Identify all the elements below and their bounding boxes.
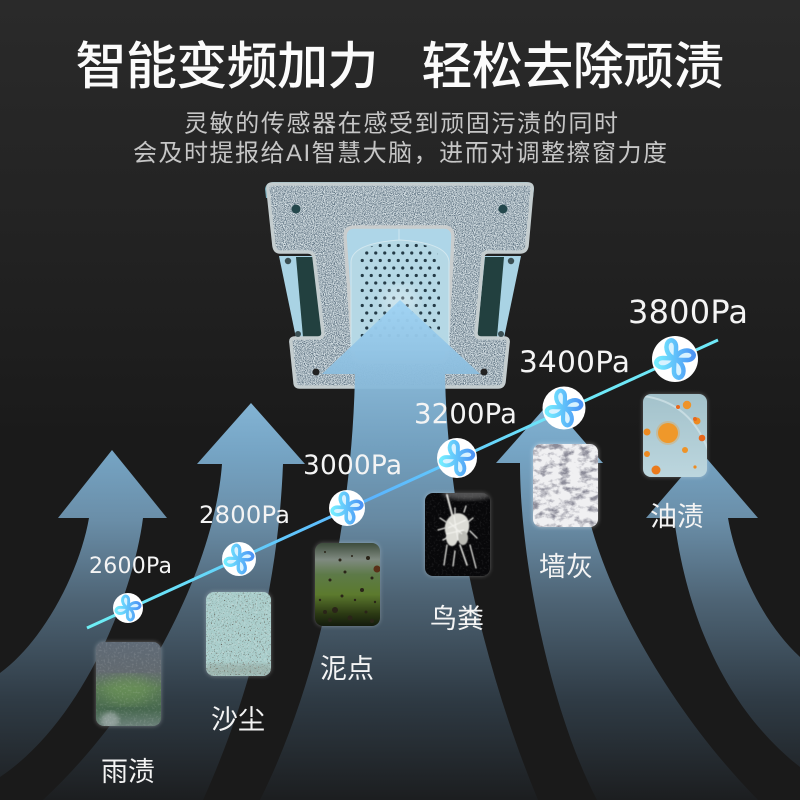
stain labels: 沙尘	[211, 705, 265, 735]
pressure labels: 3800Pa	[628, 293, 748, 331]
pressure labels	[89, 293, 748, 579]
subtitle text	[133, 110, 667, 167]
title: 智能变频加力	[76, 38, 378, 95]
photo: oil stains	[643, 394, 708, 477]
window robot device	[262, 180, 538, 392]
photo: rain stains	[96, 642, 161, 728]
stain labels: 雨渍	[101, 757, 155, 787]
stain labels: 油渍	[650, 502, 704, 532]
fan node 2600Pa	[113, 593, 143, 623]
stain labels: 墙灰	[539, 552, 593, 582]
rising arrows behind the scale	[0, 402, 800, 800]
pressure scale line	[87, 340, 718, 628]
subtitle text: 会及时提报给AI智慧大脑，进而对调整擦窗力度	[133, 140, 667, 167]
stain labels: 鸟粪	[430, 604, 484, 634]
pressure labels: 3400Pa	[519, 345, 630, 379]
fan node 3000Pa	[329, 490, 365, 526]
photo: bird droppings	[425, 486, 494, 576]
pressure labels: 3200Pa	[414, 398, 517, 430]
photo: sand dust	[206, 592, 271, 676]
photo: wall dust	[533, 444, 598, 527]
stain labels	[101, 502, 704, 787]
pressure labels: 3000Pa	[303, 450, 402, 481]
device corner bumpers	[265, 182, 534, 198]
mop pad	[270, 186, 530, 386]
fan node 3400Pa	[542, 386, 586, 430]
stain labels: 泥点	[320, 654, 374, 684]
central rising arrow	[260, 300, 538, 800]
pressure labels: 2800Pa	[199, 501, 290, 529]
left side body and wheel	[279, 256, 326, 338]
subtitle text: 灵敏的传感器在感受到顽固污渍的同时	[184, 110, 618, 138]
fan nodes	[113, 336, 698, 623]
pressure labels: 2600Pa	[89, 554, 172, 579]
fan node 3800Pa	[652, 336, 698, 382]
fan node 2800Pa	[222, 542, 256, 576]
center sensor panel	[345, 227, 453, 362]
title	[76, 38, 724, 95]
right side body and wheel	[474, 256, 521, 338]
photo: mud spots	[315, 543, 380, 626]
fan node 3200Pa	[437, 438, 477, 478]
screws	[285, 204, 514, 376]
title: 轻松去除顽渍	[422, 38, 724, 95]
